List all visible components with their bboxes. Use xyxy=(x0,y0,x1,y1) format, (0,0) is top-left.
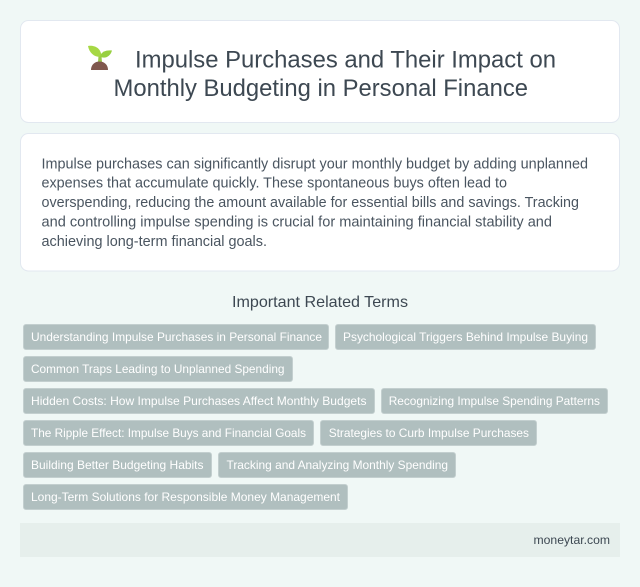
text block: summary paragraph: overspending, reducing the amount available for essential bills and savings. Tracking xyxy=(42,194,579,211)
tag: hidden costs xyxy=(24,388,374,414)
panel: related term tags xyxy=(24,324,608,510)
text block: summary paragraph: expenses that accumulate quickly. These spontaneous buys often lead to xyxy=(42,174,507,191)
panel: title card xyxy=(20,20,620,122)
text block: summary paragraph xyxy=(42,155,588,250)
tag: budgeting habits xyxy=(24,452,212,478)
tag: common traps xyxy=(24,356,292,382)
tag: common traps: Common Traps Leading to Unplanned Spending xyxy=(31,362,284,376)
tag: psychological triggers xyxy=(336,324,596,350)
text block: summary paragraph: and controlling impulse spending is crucial for maintaining financial stability and xyxy=(42,214,552,231)
title xyxy=(114,46,556,102)
title: Monthly Budgeting in Personal Finance xyxy=(114,75,528,102)
tag: ripple effect xyxy=(24,420,314,446)
tag: long-term solutions: Long-Term Solutions for Responsible Money Management xyxy=(31,490,341,504)
footer xyxy=(20,523,620,557)
tag: understanding impulse purchases: Understanding Impulse Purchases in Personal Finance xyxy=(31,330,322,344)
tag: psychological triggers: Psychological Triggers Behind Impulse Buying xyxy=(343,330,588,344)
tag: recognizing patterns: Recognizing Impulse Spending Patterns xyxy=(389,394,600,408)
footer: site name: moneytar.com xyxy=(534,533,610,547)
panel: summary card xyxy=(20,134,620,271)
tag: hidden costs: Hidden Costs: How Impulse Purchases Affect Monthly Budgets xyxy=(31,394,366,408)
tag: tracking spending xyxy=(218,452,456,478)
tag: strategies xyxy=(320,420,536,446)
tag: recognizing patterns xyxy=(382,388,608,414)
tag: tracking spending: Tracking and Analyzing Monthly Spending xyxy=(226,458,448,472)
text block: summary paragraph: Impulse purchases can significantly disrupt your monthly budget by adding unplanned xyxy=(42,155,588,172)
tag: long-term solutions xyxy=(24,484,348,510)
tag: ripple effect: The Ripple Effect: Impulse Buys and Financial Goals xyxy=(31,426,306,440)
tag: budgeting habits: Building Better Budgeting Habits xyxy=(31,458,204,472)
text block: summary paragraph: achieving long-term financial goals. xyxy=(42,233,267,250)
title: Impulse Purchases and Their Impact on xyxy=(135,46,556,74)
icon: seedling xyxy=(88,46,112,70)
heading: related terms: Important Related Terms xyxy=(232,294,408,311)
tag: strategies: Strategies to Curb Impulse Purchases xyxy=(329,426,529,440)
tag: understanding impulse purchases xyxy=(24,324,328,350)
